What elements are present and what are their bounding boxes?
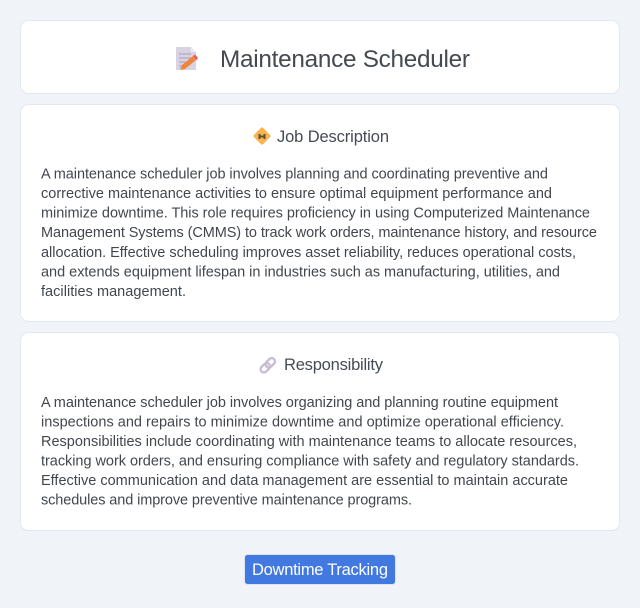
text block: responsibility: tracking work orders, and ensuring compliance with safety and regulatory standards. [41, 454, 579, 470]
icon: construction diamond [253, 127, 271, 145]
text block: responsibility [41, 395, 579, 508]
text block: job description: facilities management. [41, 284, 186, 300]
text block: job description: A maintenance scheduler job involves planning and coordinating preventive and [41, 166, 548, 182]
text block: responsibility: A maintenance scheduler job involves organizing and planning routine equipment [41, 395, 558, 411]
text block: job description: minimize downtime. This role requires proficiency in using Computerized Maintenance [41, 206, 590, 222]
panel: responsibility [20, 332, 620, 530]
text block: job description [41, 166, 597, 300]
text block: responsibility: schedules and improve preventive maintenance programs. [41, 492, 412, 508]
text block: responsibility: Effective communication and data management are essential to maintain accurate [41, 473, 568, 489]
text block: responsibility: Responsibilities include coordinating with maintenance teams to allocate resources, [41, 434, 577, 450]
icon: memo with pencil [176, 47, 198, 70]
title: Maintenance Scheduler [220, 46, 470, 73]
panel: job description [20, 104, 620, 322]
heading: responsibility: Responsibility [284, 356, 384, 374]
text block: responsibility: inspections and repairs to minimize downtime and optimize operational efficiency. [41, 414, 564, 430]
icon: chain link [259, 357, 276, 374]
text block: job description: and extends equipment lifespan in industries such as manufacturing, utilities, and [41, 264, 560, 280]
panel: title header [20, 20, 620, 94]
button: downtime tracking: Downtime Tracking [252, 561, 388, 579]
text block: job description: allocation. Effective scheduling improves asset reliability, reduces operational costs, [41, 245, 576, 261]
heading: job description: Job Description [277, 128, 389, 146]
button: downtime tracking [244, 554, 396, 584]
text block: job description: Management Systems (CMMS) to track work orders, maintenance history, and resource [41, 225, 597, 241]
text block: job description: corrective maintenance activities to ensure optimal equipment performance and [41, 186, 552, 202]
